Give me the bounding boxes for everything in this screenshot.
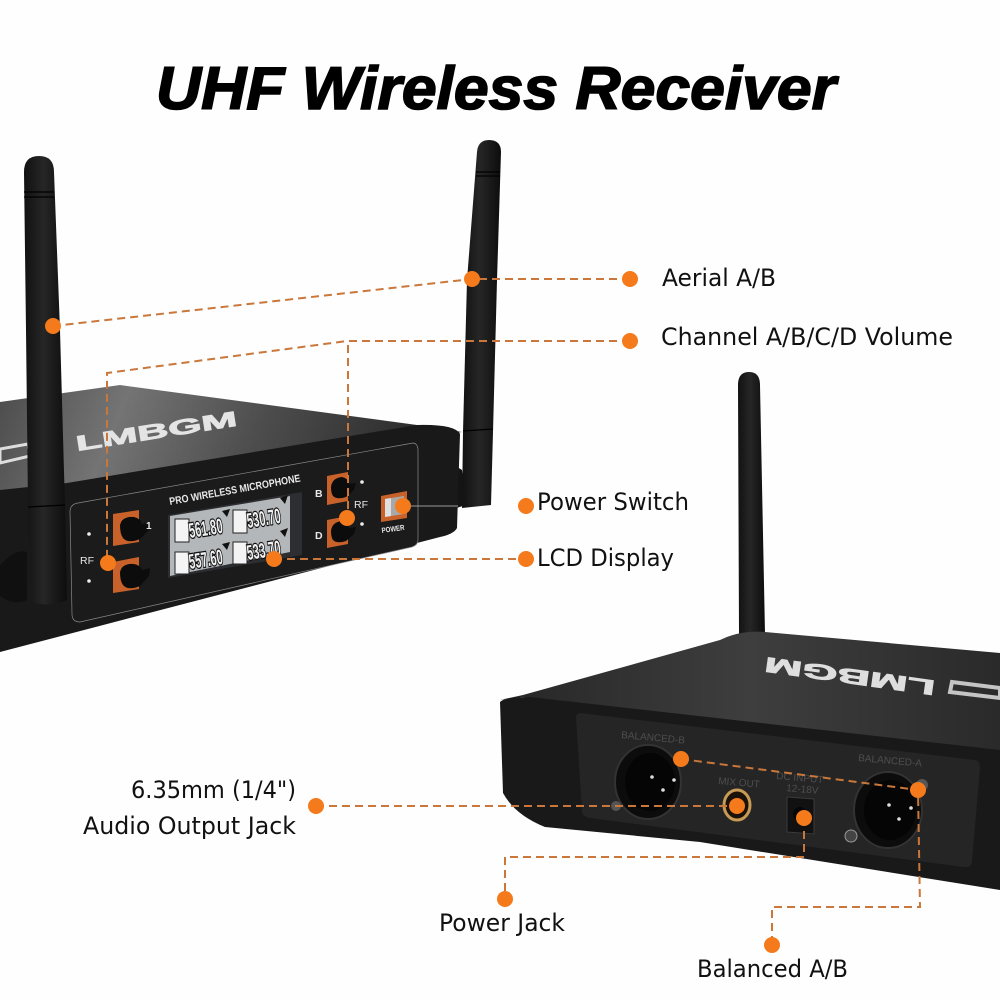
panel emblem — [0, 444, 30, 463]
volume knob 2 — [113, 557, 150, 593]
callout: Power Jack: Power Jack — [439, 909, 565, 937]
volume knob B — [327, 472, 356, 505]
callout: audio output jack — [83, 776, 745, 840]
receiver: rear view — [500, 372, 1000, 890]
panel heading: PRO WIRELESS MICROPHONE — [168, 473, 301, 508]
frequency readouts: 530.70 — [245, 505, 282, 533]
receiver top surface — [0, 385, 462, 500]
left side jack — [0, 551, 27, 602]
power switch: POWER — [381, 523, 406, 535]
rear top surface — [500, 632, 1000, 755]
power switch — [381, 491, 407, 535]
panel legends: MIX OUT — [718, 776, 760, 791]
callout: Power Jack — [439, 810, 812, 937]
callout: audio output jack: 6.35mm (1/4") — [131, 776, 296, 804]
callout: Channel volume — [100, 323, 953, 571]
callout: Power Switch — [395, 488, 689, 516]
connector panel — [576, 713, 980, 867]
right antenna — [439, 140, 501, 510]
volume knob 1: 1 — [146, 521, 152, 532]
rear logo emblem — [950, 682, 1000, 698]
volume knob 1 — [113, 510, 152, 546]
control panel — [70, 443, 418, 622]
panel labels — [80, 480, 368, 583]
callout: Balanced A/B — [673, 751, 926, 983]
panel legends: 12-18V — [786, 783, 819, 797]
receiver front face — [0, 425, 460, 652]
panel labels: D — [315, 530, 323, 542]
LCD display — [168, 492, 302, 578]
panel legends — [621, 730, 923, 797]
panel labels: RF — [354, 499, 368, 511]
callout: LCD Display — [266, 544, 674, 572]
rear logo: LMBGM — [763, 652, 937, 699]
panel labels: B — [315, 488, 323, 500]
panel labels: RF — [80, 555, 94, 567]
audio output jack — [724, 790, 750, 820]
callout: Balanced A/B: Balanced A/B — [697, 955, 848, 983]
callout: LCD Display: LCD Display — [537, 544, 674, 572]
panel legends: BALANCED-A — [858, 753, 923, 770]
callout: Aerial A/B: Aerial A/B — [662, 264, 776, 292]
frequency readouts: 557.60 — [187, 546, 224, 574]
title: UHF Wireless Receiver — [156, 55, 840, 122]
callout: Power Switch: Power Switch — [537, 488, 689, 516]
XLR connector A — [845, 772, 928, 848]
rear antenna — [738, 372, 765, 634]
DC power jack — [787, 797, 814, 834]
panel legends: DC INPUT — [776, 771, 824, 786]
panel legends: BALANCED-B — [621, 730, 686, 747]
receiver: front view — [0, 140, 501, 652]
frequency readouts: 533.70 — [245, 537, 282, 565]
XLR connector B — [611, 745, 681, 819]
frequency readouts: 561.80 — [187, 515, 224, 543]
volume knob D — [327, 516, 356, 548]
frequency readouts — [175, 495, 288, 574]
rear face — [500, 697, 1000, 890]
callout: Channel volume: Channel A/B/C/D Volume — [661, 323, 953, 351]
callout: audio output jack: Audio Output Jack — [83, 812, 296, 840]
callout: Aerial A/B — [45, 264, 776, 334]
left antenna — [24, 156, 67, 605]
brand logo on top: LMBGM — [74, 408, 239, 456]
